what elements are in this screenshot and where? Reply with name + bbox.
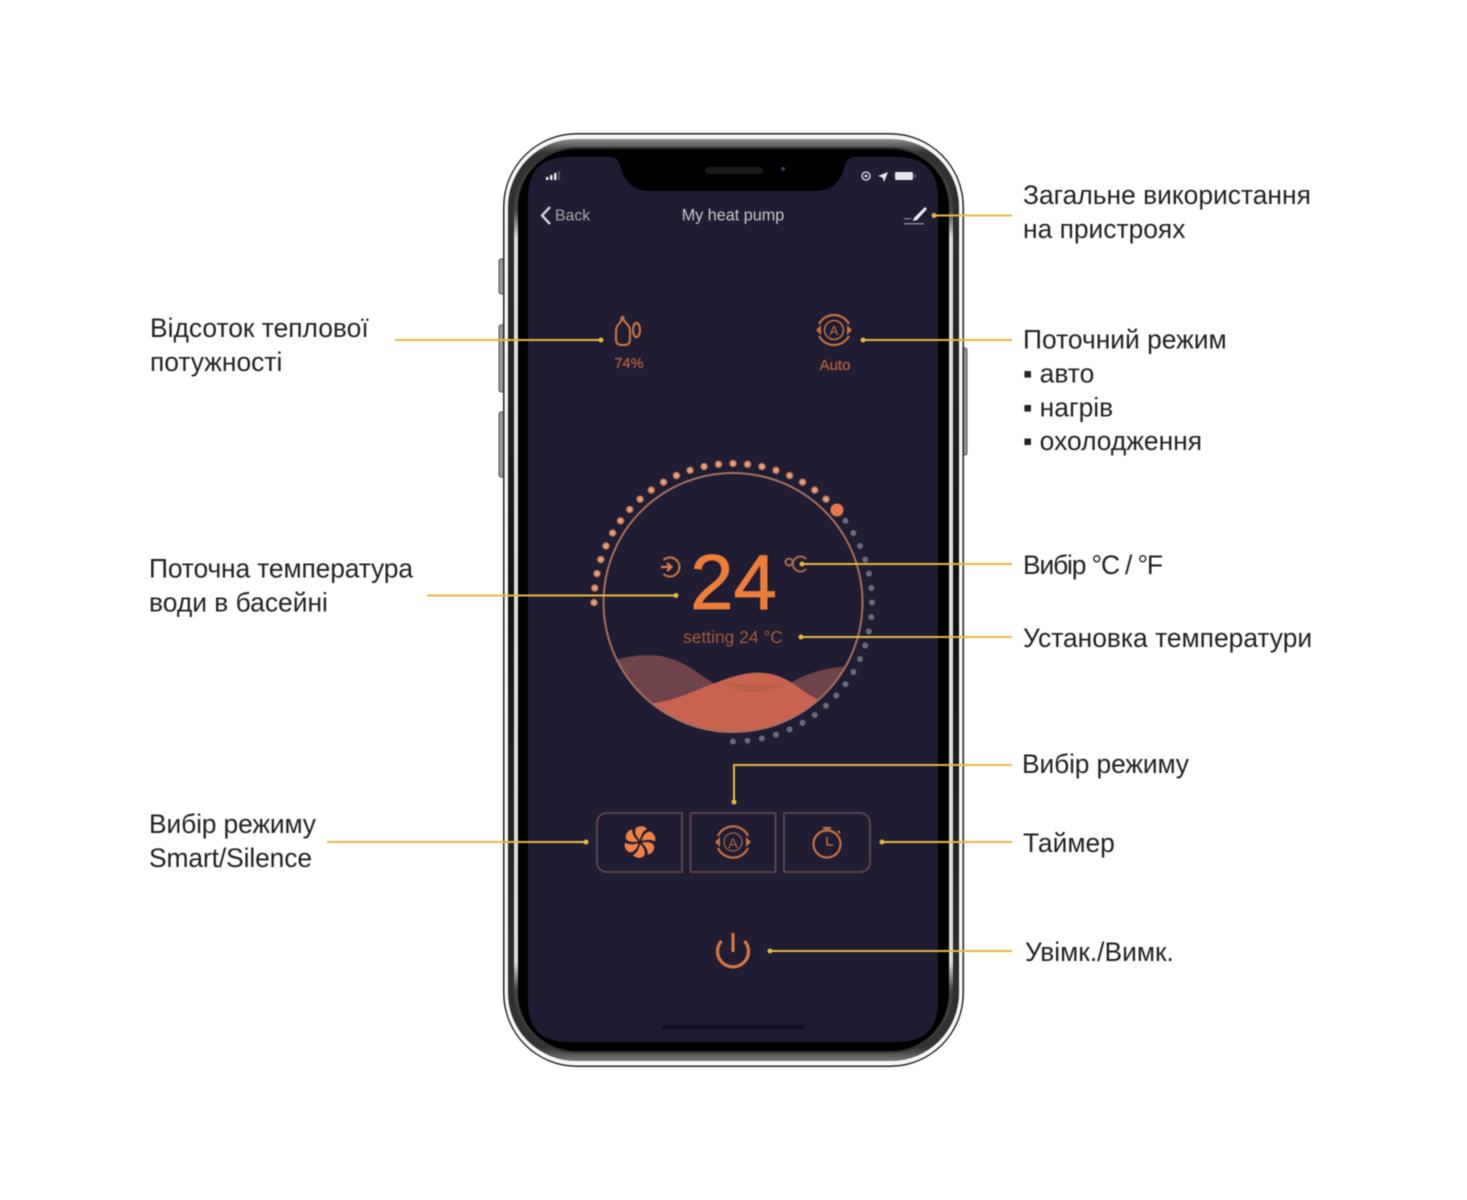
callout: heat power percent: потужності [150, 347, 282, 377]
callout: mode selection: Вибір режиму [1022, 749, 1190, 779]
screen [528, 157, 938, 1042]
callout: current mode: ▪ авто [1023, 358, 1094, 388]
unit toggle [786, 556, 806, 572]
callout: smart silence: Вибір режиму [149, 809, 317, 839]
icon: water inlet [661, 558, 679, 576]
callout: on off: Увімк./Вимк. [1025, 937, 1174, 967]
callout: timer [880, 828, 1115, 858]
setting text: setting 24 °C [683, 627, 783, 647]
icon: auto button: A [728, 835, 738, 851]
icon: auto mode [816, 315, 852, 345]
callout: temperature setting: Установка температури [1023, 623, 1312, 653]
callout: temperature setting [798, 623, 1312, 653]
temperature value: 24 [690, 538, 777, 626]
callout: usage on devices: на пристроях [1023, 214, 1185, 244]
icon: power [718, 933, 748, 967]
notch speaker and camera [705, 167, 785, 174]
callout: unit selection: Вибір °C / °F [1023, 550, 1163, 580]
callout: heat power percent [150, 313, 604, 377]
nav title: My heat pump [682, 206, 784, 224]
callout: usage on devices [932, 180, 1311, 244]
dial ring [604, 473, 862, 732]
callout: unit selection [800, 550, 1163, 580]
icon: fan [623, 826, 657, 858]
callout: on off [768, 937, 1174, 967]
side buttons [499, 259, 967, 477]
icon: auto mode: A [830, 323, 839, 338]
icon: timer [814, 828, 840, 858]
temperature dial [591, 460, 875, 760]
callout: current mode [860, 324, 1227, 456]
callout: water temperature: води в басейні [149, 588, 328, 618]
callout: water temperature [149, 554, 678, 618]
icon: edit pencil [904, 207, 927, 224]
status bar [546, 171, 916, 182]
callout: mode selection [732, 749, 1190, 804]
callout: heat power percent: Відсоток теплової [150, 313, 369, 343]
callout: current mode: ▪ охолодження [1023, 426, 1202, 456]
nav bar: back: Back [555, 208, 590, 224]
callout: timer: Таймер [1023, 828, 1115, 858]
icon: heat power [616, 317, 640, 345]
mode buttons [597, 813, 870, 872]
icon: auto button [715, 826, 751, 858]
callout: usage on devices: Загальне використання [1023, 180, 1311, 210]
callout: current mode: ▪ нагрів [1023, 392, 1113, 422]
callout: smart silence [149, 809, 588, 873]
phone frame [503, 133, 964, 1067]
home indicator [662, 1025, 804, 1029]
label: auto: Auto [820, 357, 850, 374]
dial dots [591, 460, 875, 744]
waves [618, 654, 844, 732]
callout: water temperature: Поточна температура [149, 554, 413, 584]
phone [499, 133, 967, 1067]
label: 74%: 74% [614, 356, 644, 372]
callout: smart silence: Smart/Silence [149, 843, 312, 873]
callout: current mode: Поточний режим [1023, 324, 1227, 354]
